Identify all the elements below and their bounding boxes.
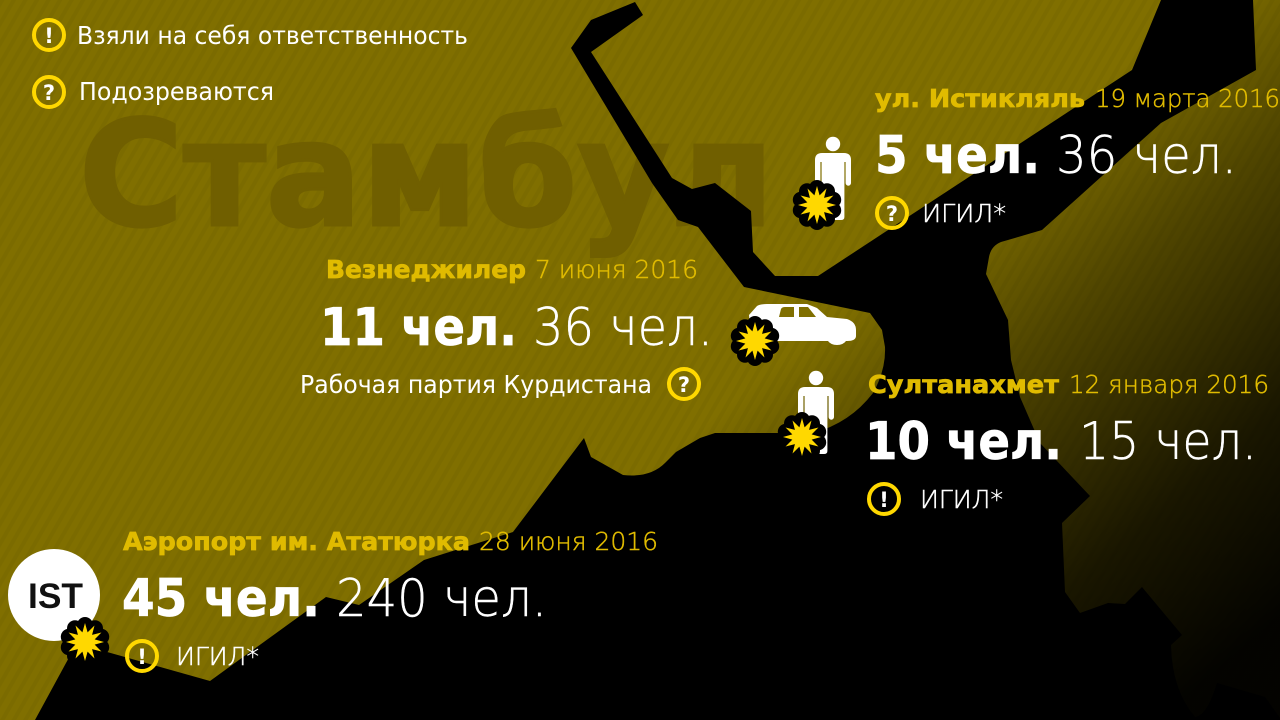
location and date: Аэропорт им. Ататюрка <box>123 527 470 556</box>
casualties: 45 чел. <box>122 569 320 629</box>
location and date: 19 марта 2016 <box>1095 84 1280 113</box>
panel: Istiklal attack <box>875 84 1280 228</box>
panel: Atatürk airport attack <box>122 527 658 671</box>
icon: suspected: ? <box>886 202 898 226</box>
casualties <box>320 298 713 358</box>
icon: suspected <box>669 369 699 399</box>
icon: claimed <box>869 484 899 514</box>
panel: Vezneciler attack <box>300 255 713 399</box>
icon: claimed responsibility: ! <box>44 24 54 48</box>
location and date: ул. Истикляль <box>875 84 1085 113</box>
perpetrator: Рабочая партия Курдистана <box>300 370 652 399</box>
icon: claimed: ! <box>879 488 889 512</box>
casualties <box>875 126 1237 186</box>
legend <box>34 20 468 107</box>
icon: person at Sultanahmet <box>798 371 834 454</box>
location and date: Везнеджилер <box>326 255 526 284</box>
location and date <box>868 370 1269 399</box>
icon: suspected <box>877 198 907 228</box>
icon: claimed: ! <box>137 645 147 669</box>
icon: explosion at airport <box>61 617 109 667</box>
location and date: 28 июня 2016 <box>479 527 658 556</box>
location and date <box>326 255 698 284</box>
location and date: Султанахмет <box>868 370 1060 399</box>
icon: car at Vezneciler <box>749 304 856 345</box>
icon: suspected <box>34 77 64 107</box>
icon: explosion at Sultanahmet <box>778 412 826 462</box>
casualties: 5 чел. <box>875 126 1040 186</box>
casualties: 240 чел. <box>336 569 547 629</box>
icon: explosion at Istiklal <box>793 180 841 230</box>
perpetrator: ИГИЛ* <box>922 199 1006 228</box>
perpetrator: ИГИЛ* <box>176 642 259 671</box>
icon: IST airport badge <box>8 549 100 641</box>
casualties: 36 чел. <box>1056 126 1237 186</box>
icon: explosion at Vezneciler <box>731 316 779 366</box>
location and date: 7 июня 2016 <box>535 255 698 284</box>
casualties: 11 чел. <box>320 298 517 358</box>
panel: Sultanahmet attack <box>865 370 1269 514</box>
legend label: suspected: Подозреваются <box>79 77 274 106</box>
icon: IST airport badge: IST <box>28 577 83 616</box>
casualties <box>865 412 1257 472</box>
casualties: 36 чел. <box>533 298 713 358</box>
location and date: 12 января 2016 <box>1069 370 1269 399</box>
icon: claimed responsibility <box>34 20 64 50</box>
location and date <box>875 84 1280 113</box>
perpetrator: ИГИЛ* <box>920 485 1003 514</box>
casualties <box>122 569 547 629</box>
icon: claimed <box>127 641 157 671</box>
casualties: 15 чел. <box>1079 412 1257 472</box>
icon: suspected: ? <box>43 81 55 105</box>
title: Стамбул: Стамбул <box>79 90 774 260</box>
casualties: 10 чел. <box>865 412 1062 472</box>
legend label: claimed: Взяли на себя ответственность <box>77 21 468 50</box>
location and date <box>123 527 658 556</box>
icon: suspected: ? <box>678 373 690 397</box>
icon: person at Istiklal <box>815 137 851 220</box>
